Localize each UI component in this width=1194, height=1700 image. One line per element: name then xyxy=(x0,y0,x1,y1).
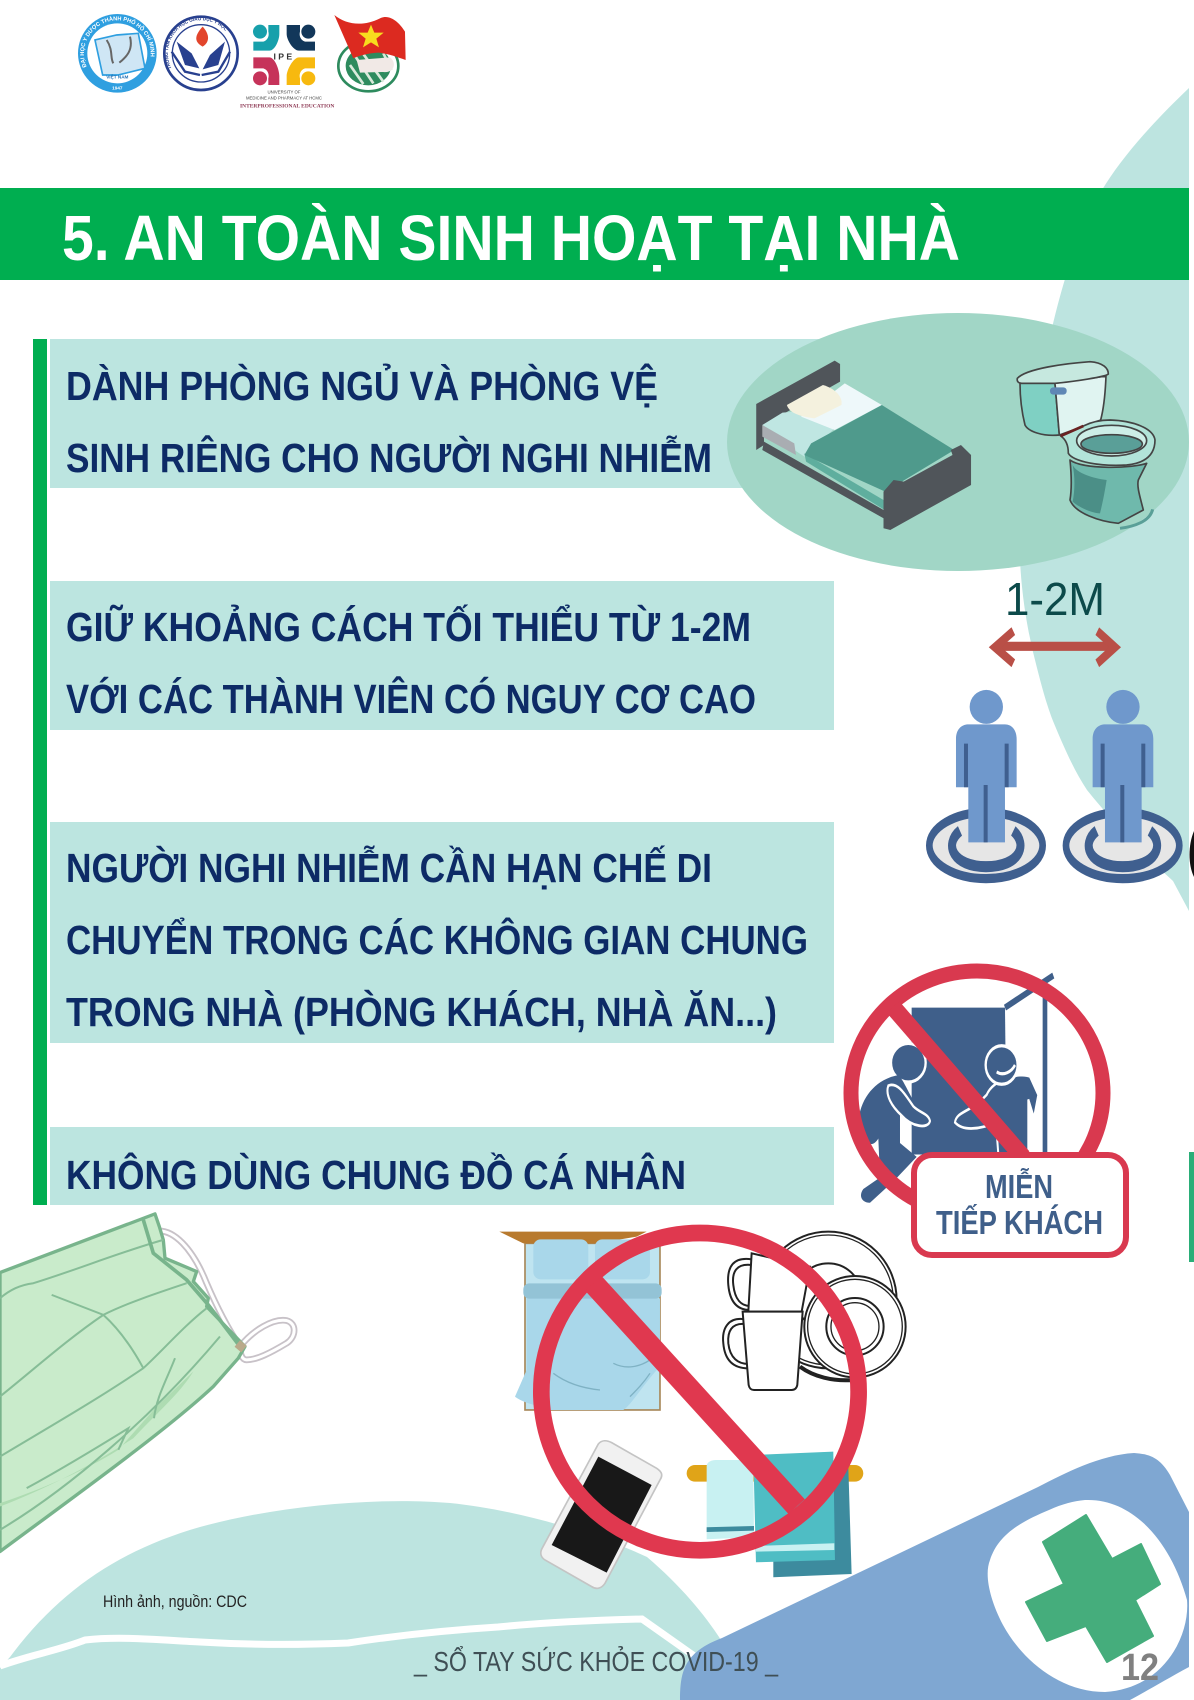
icon: phone xyxy=(541,1441,662,1588)
panel: limit movement xyxy=(50,822,834,1043)
panel: left green rail xyxy=(33,339,47,1205)
image credit: Hình ảnh, nguồn: CDC xyxy=(103,1592,247,1611)
title: 5. AN TOÀN SINH HOẠT TẠI NHÀ xyxy=(62,202,960,274)
logo: medical university: VIỆT NAM xyxy=(106,73,129,80)
icon: bed xyxy=(756,361,971,530)
logo: medical university xyxy=(78,14,157,93)
logos xyxy=(78,14,406,110)
logo: IPE: IPE xyxy=(274,51,294,61)
distance diagram xyxy=(929,631,1179,879)
icon: toilet xyxy=(1017,362,1155,528)
text: separate room line 2: SINH RIÊNG CHO NGƯỜI NGHI NHIỄM xyxy=(66,435,712,481)
background shape: bottom teal hill xyxy=(0,1501,740,1700)
icon: red prohibition ring xyxy=(851,971,1103,1215)
text: limit movement line 1: NGƯỜI NGHI NHIỄM CẦN HẠN CHẾ DI xyxy=(66,845,712,891)
white blob with cross xyxy=(988,1500,1187,1692)
icon: visitor xyxy=(858,1043,930,1203)
page number: 12 xyxy=(1121,1647,1159,1689)
panel: separate room xyxy=(50,339,835,488)
logo: IPE: UNIVERSITY OF xyxy=(267,89,301,94)
logo: education center xyxy=(163,15,239,92)
callout: no visitors xyxy=(914,1155,1126,1255)
logo: youth union xyxy=(334,15,406,91)
text: separate room: DÀNH PHÒNG NGỦ VÀ PHÒNG VỆ xyxy=(66,363,658,409)
text: keep distance: GIỮ KHOẢNG CÁCH TỐI THIỂU TỪ 1-2M xyxy=(66,603,751,650)
text: limit movement line 3: TRONG NHÀ (PHÒNG KHÁCH, NHÀ ĂN...) xyxy=(66,989,777,1035)
text: no sharing: KHÔNG DÙNG CHUNG ĐỒ CÁ NHÂN xyxy=(66,1152,686,1198)
oval with bed and toilet xyxy=(727,313,1189,571)
background shape: blue kit xyxy=(680,1453,1189,1700)
background shape: top right teal curve xyxy=(1020,88,1189,911)
icon: person right xyxy=(1066,690,1179,879)
logo: medical university: ĐẠI HỌC Y DƯỢC THÀNH PHỐ HỒ CHÍ MINH xyxy=(80,16,155,68)
icon: doorway xyxy=(912,975,1053,1155)
panel: keep distance xyxy=(50,581,834,730)
callout text line 1: MIỄN xyxy=(985,1168,1053,1205)
callout text line 2: TIẾP KHÁCH xyxy=(936,1204,1103,1241)
logo: education center: TRUNG TÂM KHOA HỌC GIÁO DỤC Y HỌC xyxy=(166,18,227,70)
arrow: two-way distance xyxy=(995,631,1115,663)
text: keep distance line 2: VỚI CÁC THÀNH VIÊN CÓ NGUY CƠ CAO xyxy=(66,676,756,722)
icon: green cross xyxy=(1026,1515,1160,1662)
icon: person left xyxy=(929,690,1043,879)
logo: IPE xyxy=(240,25,334,110)
footer label: _ SỔ TAY SỨC KHỎE COVID-19 _ xyxy=(413,1645,778,1677)
icon: plates and cups xyxy=(723,1232,906,1390)
distance label: 1-2M xyxy=(1005,573,1105,625)
icon: surgical mask xyxy=(0,1214,294,1552)
edge fragment: black arc xyxy=(1190,831,1194,877)
logo: IPE: MEDICINE AND PHARMACY AT HCMC xyxy=(246,95,322,100)
icon: towels xyxy=(687,1452,863,1577)
logo: medical university: 1947 xyxy=(112,85,123,90)
logo: IPE: INTERPROFESSIONAL EDUCATION xyxy=(240,104,334,110)
panel: no sharing xyxy=(50,1127,834,1205)
text: limit movement line 2: CHUYỂN TRONG CÁC KHÔNG GIAN CHUNG xyxy=(66,916,808,963)
no visitors sign xyxy=(851,971,1126,1255)
edge fragment: green strip xyxy=(1189,1152,1194,1262)
icon: host xyxy=(955,1046,1038,1155)
decorative white stripe on hill xyxy=(0,1619,700,1666)
icon: bed top view xyxy=(499,1232,662,1410)
header band xyxy=(0,188,1189,280)
shared items group xyxy=(499,1232,906,1588)
icon: red prohibition sign xyxy=(541,1233,859,1550)
